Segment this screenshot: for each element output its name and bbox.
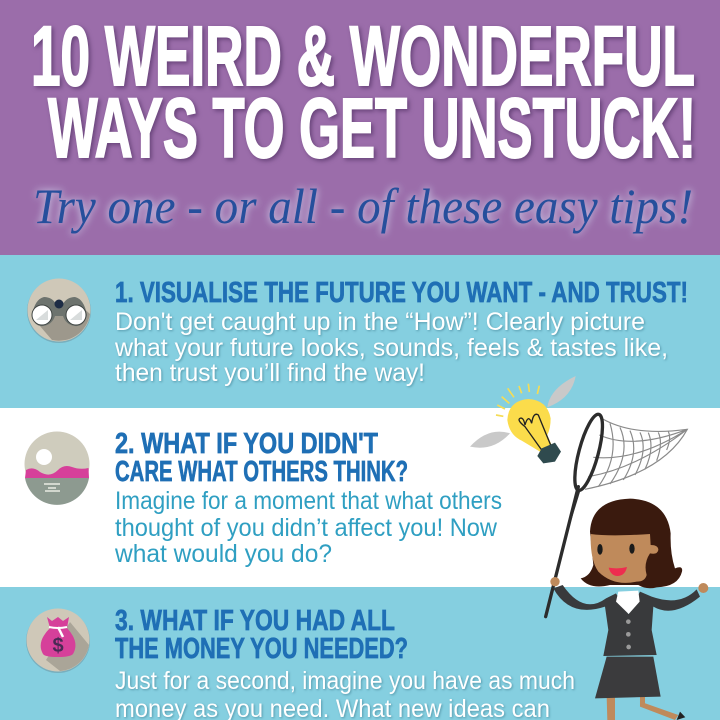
icon: butterfly net [569,412,687,520]
panel: tip 3 [0,587,720,720]
subtitle: Try one - or all - of these easy tips! [33,178,693,234]
woman figure [546,487,708,720]
heading: CARE WHAT OTHERS THINK? [115,456,408,488]
body text [114,487,502,568]
legs [607,697,678,720]
hair [581,499,682,588]
body text: Don't get caught up in the “How”! Clearly picture [115,308,645,336]
buttons [626,619,631,624]
body text: Just for a second, imagine you have as much [115,667,575,695]
heading: 2. WHAT IF YOU DIDN'T [115,428,378,460]
body text: what would you do? [114,540,332,568]
hands [550,577,560,586]
body text: what your future looks, sounds, feels & tastes like, [114,334,668,362]
body text [115,667,575,720]
net handle [546,487,578,617]
skirt [595,657,661,698]
body text: thought of you didn’t affect you! Now [115,514,498,542]
panel: tip 1 [0,255,720,408]
heading: THE MONEY YOU NEEDED? [115,633,408,665]
heading [115,428,408,488]
icon: money bag: $ [52,635,64,657]
icon: landscape [24,432,90,505]
jacket [553,585,700,656]
heading: 3. WHAT IF YOU HAD ALL [115,605,395,637]
panel: tip 2 [0,408,720,587]
icon: winged light bulb [470,376,576,463]
icon: money bag [26,608,90,673]
title [31,9,696,175]
body text: then trust you’ll find the way! [115,359,425,387]
panel: purple header [0,0,720,255]
face [591,534,658,583]
body text [114,308,668,387]
body text: Imagine for a moment that what others [115,487,502,515]
icon: binoculars [27,278,91,343]
heading [115,605,408,665]
